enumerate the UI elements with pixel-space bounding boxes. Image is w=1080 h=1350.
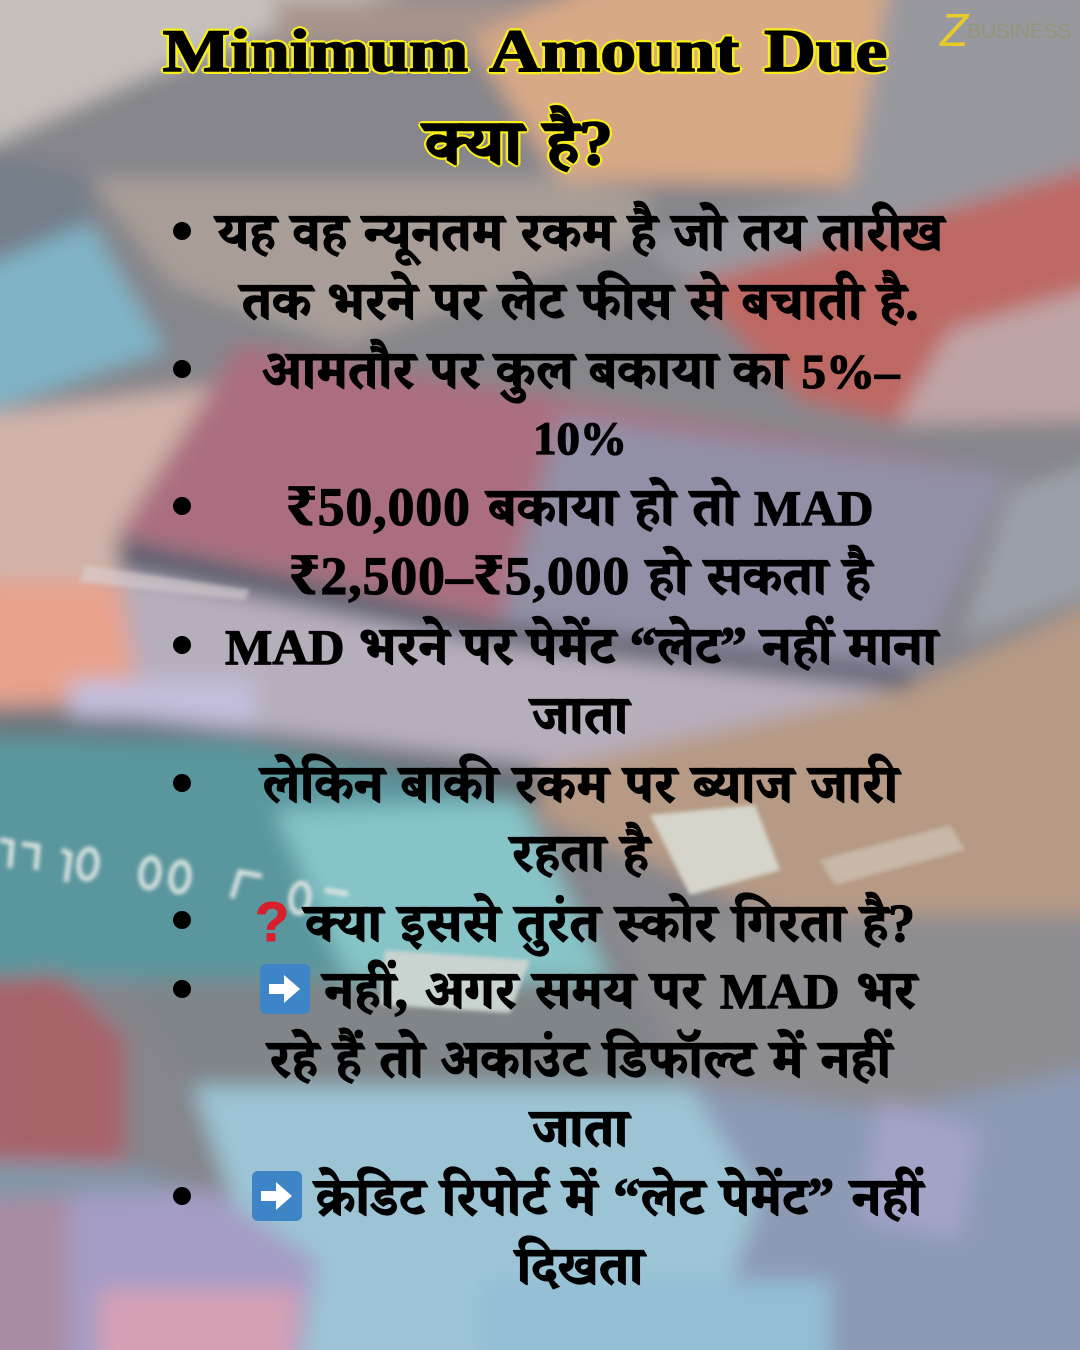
bullet 7: answer: रहे हैं तो अकाउंट डिफॉल्ट में नहीं — [269, 1029, 891, 1089]
bullet 7: answer: जाता — [532, 1098, 628, 1158]
bullet 6: question: ? क्या इससे तुरंत स्कोर गिरता है? — [255, 890, 915, 953]
bullet 2: percentage: 10% — [533, 413, 627, 465]
bullet 3: example amount: ₹50,000 बकाया हो तो MAD — [287, 477, 873, 537]
bullet 3: example amount — [173, 476, 875, 606]
bullet 4: not late: MAD भरने पर पेमेंट “लेट” नहीं माना — [225, 616, 937, 676]
bullet 2: percentage: आमतौर पर कुल बकाया का 5%– — [263, 340, 899, 400]
bullet 2: percentage — [173, 338, 900, 465]
bullet 4: not late — [173, 615, 941, 745]
bullet 5: interest continues — [173, 753, 902, 883]
bullet 1: definition — [173, 200, 947, 331]
bullet 5: interest continues: लेकिन बाकी रकम पर ब्याज जारी — [262, 754, 898, 814]
title — [160, 18, 889, 178]
bullet 8: credit report: दिखता — [517, 1236, 643, 1296]
bullet 8: credit report: क्रेडिट रिपोर्ट में “लेट पेमेंट” नहीं — [316, 1167, 922, 1227]
logo: Z Business: Z — [940, 4, 968, 56]
bullet 7: answer: नहीं, अगर समय पर MAD भर — [324, 960, 916, 1020]
logo: Z Business: BUSINESS — [967, 19, 1071, 43]
bullet list — [173, 200, 947, 1296]
bullet 3: example amount: ₹2,500–₹5,000 हो सकता है — [289, 546, 871, 606]
bullet 5: interest continues: रहता है — [511, 823, 649, 883]
bullet 1: definition: तक भरने पर लेट फीस से बचाती है. — [241, 271, 919, 331]
bullet 1: definition: यह वह न्यूनतम रकम है जो तय तारीख — [217, 202, 943, 262]
title: Minimum Amount Due — [163, 18, 887, 84]
bullet 4: not late: जाता — [532, 685, 628, 745]
icon: blue arrow — [260, 964, 310, 1014]
title: क्या है? — [425, 107, 613, 178]
logo: Z Business — [939, 4, 1071, 56]
icon: blue arrow — [252, 1171, 302, 1221]
